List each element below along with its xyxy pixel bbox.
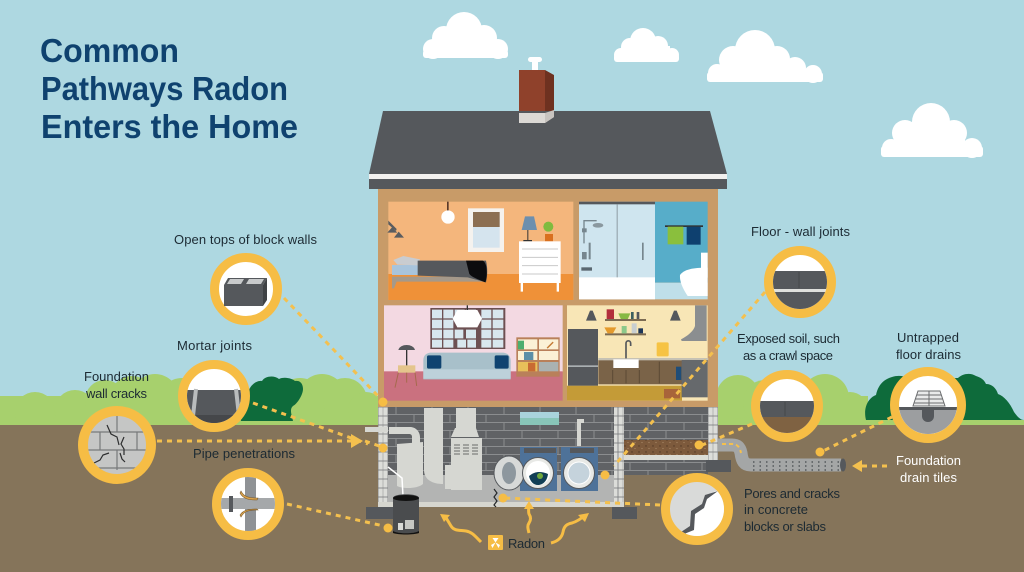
basement walls xyxy=(388,407,708,475)
radon legend with wavy arrows: Radon xyxy=(508,536,545,551)
label: foundation drain tiles xyxy=(896,453,961,485)
sump pit xyxy=(388,467,419,534)
callout: pores and cracks xyxy=(666,478,840,540)
label: foundation drain tiles: Foundation xyxy=(896,453,961,468)
room: living room xyxy=(384,305,563,401)
room: bathroom xyxy=(579,202,708,299)
callout: open tops of block walls xyxy=(174,232,318,320)
callout: pipe penetrations: Pipe penetrations xyxy=(193,446,296,461)
pathway lines and arrows xyxy=(157,292,892,532)
block pillars xyxy=(378,407,718,503)
title xyxy=(40,32,298,145)
callout: pipe penetrations xyxy=(193,446,296,536)
roof xyxy=(369,110,727,189)
callout: mortar joints: Mortar joints xyxy=(177,338,252,353)
callout: foundation wall cracks xyxy=(83,369,151,479)
rooms, drawn in 3x crop coordinates xyxy=(384,202,708,401)
callout: floor-wall joints: Floor - wall joints xyxy=(751,224,850,239)
callout: pores and cracks: in concrete xyxy=(744,502,808,517)
room: kitchen xyxy=(567,305,708,401)
basement window xyxy=(520,412,559,425)
water heater and vent xyxy=(365,427,423,488)
chimney xyxy=(519,57,554,117)
slab xyxy=(378,502,624,507)
callout: floor-wall joints xyxy=(751,224,850,314)
callout: exposed soil: as a crawl space xyxy=(743,348,833,363)
clouds xyxy=(423,12,983,158)
crawl space soil xyxy=(624,440,718,460)
basement floor xyxy=(388,475,614,502)
callout: pores and cracks: Pores and cracks xyxy=(744,486,840,501)
callout: foundation wall cracks: Foundation xyxy=(84,369,149,384)
callout: untrapped floor drains xyxy=(894,330,962,438)
title: Pathways Radon xyxy=(41,70,288,107)
callout: exposed soil: Exposed soil, such xyxy=(737,331,840,346)
hills and bushes xyxy=(0,374,1024,432)
callout: mortar joints xyxy=(177,338,252,428)
callout: foundation wall cracks: wall cracks xyxy=(85,386,148,401)
label: foundation drain tiles: drain tiles xyxy=(900,470,958,485)
callout: untrapped floor drains: floor drains xyxy=(896,347,962,362)
room: bedroom xyxy=(387,202,573,300)
radon legend with wavy arrows xyxy=(440,501,589,551)
callout: open tops of block walls: Open tops of block walls xyxy=(174,232,318,247)
title: Common xyxy=(40,32,179,69)
callout: pores and cracks: blocks or slabs xyxy=(744,519,826,534)
callout: exposed soil xyxy=(737,331,840,438)
slab crack xyxy=(494,489,497,507)
title: Enters the Home xyxy=(41,108,298,145)
foundation drain tile xyxy=(718,444,846,472)
house walls xyxy=(378,188,718,408)
basement xyxy=(365,407,731,534)
footings xyxy=(366,460,731,519)
callout: untrapped floor drains: Untrapped xyxy=(897,330,959,345)
ground xyxy=(0,425,1024,572)
washer and dryer xyxy=(494,421,598,491)
furnace xyxy=(424,408,482,490)
